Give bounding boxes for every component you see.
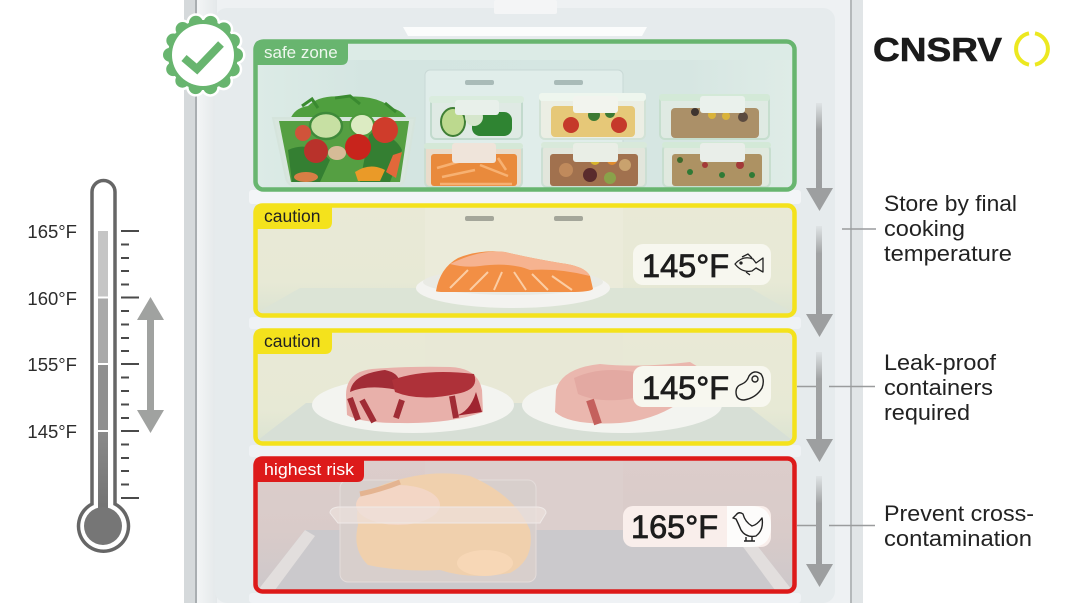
logo: CNSRV — [873, 31, 1048, 68]
panel: highest risk — [254, 457, 794, 592]
text: store by final cooking temperature: temperature — [884, 241, 1012, 266]
panel: caution fish — [254, 204, 794, 316]
container: cucumbers — [429, 96, 524, 139]
text: prevent cross-contamination: Prevent cross- — [884, 501, 1034, 526]
text: prevent cross-contamination — [884, 501, 1034, 551]
flow arrow 1 — [806, 103, 833, 211]
text: store by final cooking temperature: Store by final — [884, 191, 1017, 216]
icon: steak — [736, 372, 763, 400]
double-headed arrow — [137, 297, 164, 433]
thermometer labels: 165°F — [27, 221, 77, 242]
text: leak-proof containers required: containers — [884, 375, 993, 400]
text: leak-proof containers required: required — [884, 400, 970, 425]
salad bowl — [273, 96, 415, 186]
text: prevent cross-contamination: contamination — [884, 526, 1032, 551]
container: beans — [541, 142, 647, 187]
temperature pill: 145 fish — [633, 244, 771, 285]
label: caution: caution — [264, 206, 320, 226]
frame: caution fish — [256, 206, 794, 316]
pork chop on plate — [522, 362, 722, 433]
thermometer — [78, 180, 139, 551]
container: quinoa — [662, 142, 771, 187]
text: store by final cooking temperature — [884, 191, 1017, 266]
panel: caution meat — [254, 329, 794, 444]
temperature pill: 145 meat — [633, 366, 771, 407]
text: leak-proof containers required — [884, 350, 997, 425]
salmon on plate — [416, 251, 610, 308]
icon: fish — [735, 254, 763, 275]
frame: caution meat — [256, 330, 794, 444]
label: caution — [254, 204, 332, 229]
chicken in tub — [330, 473, 546, 582]
label: safe zone: safe zone — [264, 43, 338, 62]
thermometer ticks — [121, 231, 139, 498]
frame: highest risk — [256, 458, 794, 592]
label: highest risk — [254, 457, 364, 482]
text: store by final cooking temperature: cooking — [884, 216, 965, 241]
container: carrots — [424, 143, 523, 187]
flow arrow 3 — [806, 352, 833, 462]
thermometer labels: 160°F — [27, 288, 77, 309]
frame: safe zone — [256, 42, 794, 190]
fridge interior — [184, 0, 863, 603]
beef steak on plate — [312, 367, 514, 433]
label: caution: caution — [264, 331, 320, 351]
temperature pill: 165 poultry — [623, 506, 771, 547]
thermometer labels: 155°F — [27, 354, 77, 375]
container: pasta — [539, 93, 646, 139]
logo: CNSRV: CNSRV — [873, 31, 1002, 68]
temperature pill: 145 fish: 145°F — [642, 248, 729, 284]
connector lines — [797, 229, 876, 526]
container: grain — [659, 94, 770, 139]
temperature pill: 145 meat: 145°F — [642, 370, 729, 406]
thermometer labels: 145°F — [27, 421, 77, 442]
icon: safe badge — [168, 20, 238, 90]
icon: chicken — [733, 513, 762, 541]
panel: safe zone — [254, 40, 794, 190]
icon: logo ring — [1016, 33, 1048, 65]
temperature pill: 165 poultry: 165°F — [631, 509, 718, 545]
text: leak-proof containers required: Leak-proof — [884, 350, 997, 375]
flow arrow 2 — [806, 226, 833, 337]
flow arrow 4 — [806, 476, 833, 587]
thermometer labels — [27, 221, 77, 442]
label: highest risk: highest risk — [264, 460, 355, 479]
label: caution — [254, 329, 332, 354]
label: safe zone — [254, 40, 348, 65]
